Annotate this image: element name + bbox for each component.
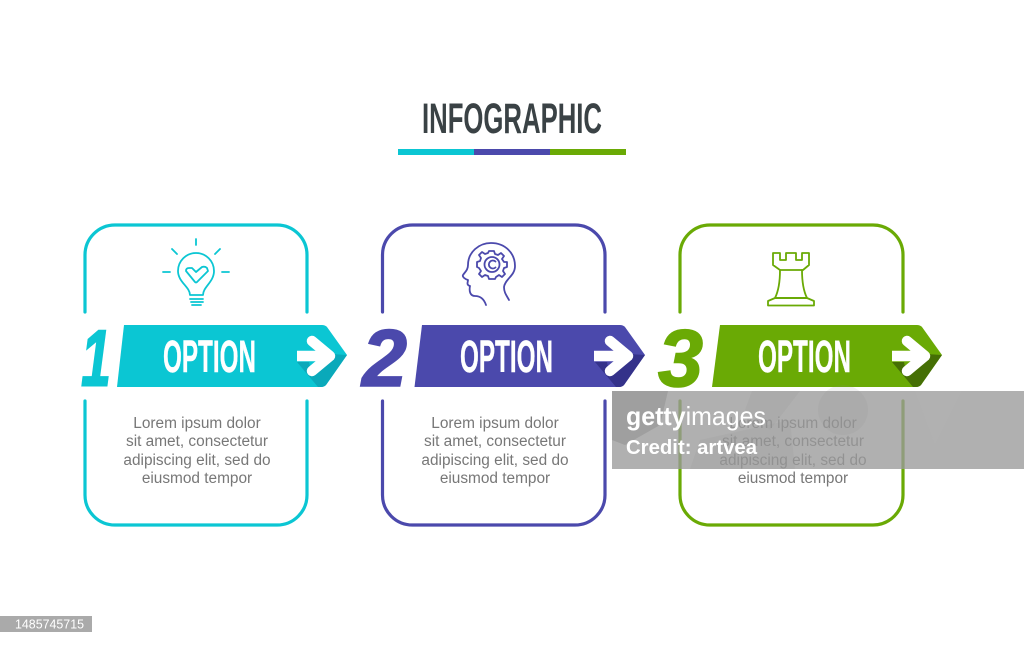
icon: white arrow 1 — [297, 341, 330, 371]
panel: option 3 — [658, 225, 942, 525]
icon: light bulb with check — [163, 239, 229, 305]
card outline 3 — [680, 225, 903, 525]
card outline 2 — [382, 225, 605, 525]
text block 2: sit amet, consectetur — [424, 433, 566, 450]
watermark band — [612, 385, 1024, 469]
arrow banner 2 — [414, 325, 645, 387]
arrow banner 3 — [712, 325, 942, 387]
image id label: 1485745715 — [15, 618, 84, 632]
image id label — [0, 616, 92, 632]
arrow shadow 1 — [297, 354, 347, 387]
icon: white arrow 3 — [892, 341, 925, 371]
icon: white arrow 2 — [594, 341, 628, 371]
title: INFOGRAPHIC — [422, 95, 602, 143]
text block 1: Lorem ipsum dolor — [133, 415, 261, 432]
arrow shadow 3 — [892, 354, 942, 387]
number 3: 3 — [658, 314, 703, 404]
text block 3: eiusmod tempor — [738, 470, 848, 487]
text block 3: adipiscing elit, sed do — [719, 452, 867, 469]
number 2: 2 — [360, 314, 407, 404]
text block 1: sit amet, consectetur — [126, 433, 268, 450]
title underline — [398, 149, 626, 155]
text block 3: Lorem ipsum dolor — [729, 415, 857, 432]
watermark credit: Credit: artvea — [626, 437, 758, 459]
option label 2: OPTION — [460, 331, 553, 382]
option label 1: OPTION — [163, 331, 256, 382]
text block 2: eiusmod tempor — [440, 470, 550, 487]
arrow banner 1 — [117, 325, 347, 387]
icon: chess rook — [768, 253, 814, 306]
text block 1: eiusmod tempor — [142, 470, 252, 487]
text block 1: adipiscing elit, sed do — [123, 452, 271, 469]
panel: option 2 — [360, 225, 645, 525]
card outline 1 — [85, 225, 307, 525]
text block 3: sit amet, consectetur — [722, 433, 864, 450]
watermark logo: gettyimages — [626, 401, 766, 431]
text block 2: Lorem ipsum dolor — [431, 415, 559, 432]
arrow shadow 2 — [595, 354, 645, 387]
number 1: 1 — [81, 314, 111, 404]
panel: option 1 — [81, 225, 347, 525]
option label 3: OPTION — [758, 331, 851, 382]
text block 2: adipiscing elit, sed do — [421, 452, 569, 469]
icon: head with gear — [463, 243, 515, 305]
